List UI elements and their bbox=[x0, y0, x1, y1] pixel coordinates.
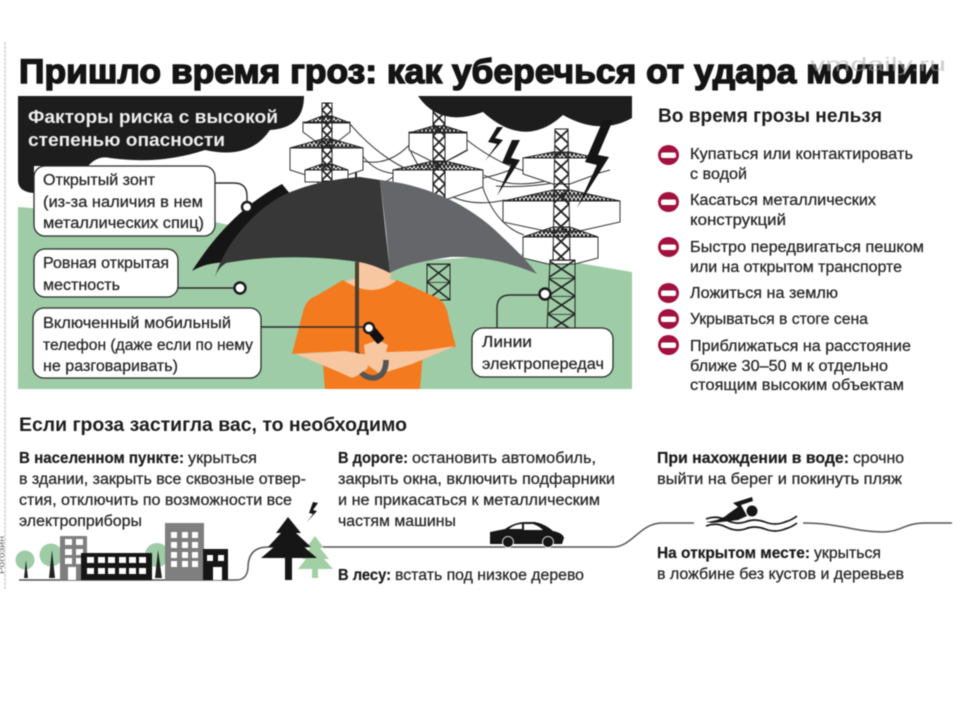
lightning bolts bbox=[485, 120, 613, 208]
text: on the road: В дороге: bbox=[338, 450, 408, 467]
text: in a town: укрыться bbox=[188, 450, 257, 467]
text: on the road: остановить автомобиль, bbox=[412, 450, 596, 467]
item: moving fast bbox=[658, 237, 924, 276]
text: in a town: в здании, закрыть все сквозные отвер- bbox=[19, 471, 306, 488]
umbrella hook handle bbox=[357, 352, 386, 378]
green trees bbox=[16, 543, 169, 578]
text: in the forest: встать под низкое дерево bbox=[395, 567, 584, 584]
callout: umbrella: металлических спиц) bbox=[43, 215, 204, 232]
black fir bbox=[261, 517, 317, 580]
text: in the open bbox=[657, 545, 904, 583]
text: in the forest: В лесу: bbox=[338, 567, 391, 584]
item: moving fast: или на открытом транспорте bbox=[690, 259, 902, 276]
text: in the open: На открытом месте: bbox=[657, 545, 810, 562]
item: tall objects: ближе 30–50 м к отдельно bbox=[690, 358, 888, 375]
callout: power lines bbox=[472, 288, 613, 377]
heading: risk factors bbox=[28, 106, 278, 150]
wires bbox=[291, 124, 610, 235]
text: on the road: закрыть окна, включить подфарники bbox=[338, 471, 615, 488]
heading: forbidden: Во время грозы нельзя bbox=[658, 105, 882, 127]
text: on the road: и не прикасаться к металлическим bbox=[338, 492, 600, 509]
item: bathing: с водой bbox=[690, 166, 747, 183]
storm cloud right bbox=[418, 96, 632, 132]
gray tall building bbox=[165, 523, 204, 580]
panel: forbidden during a storm bbox=[658, 105, 924, 394]
panel: risk factors illustration bbox=[18, 96, 632, 389]
text: on the road bbox=[338, 450, 615, 530]
text: in the open: укрыться bbox=[814, 545, 881, 562]
text: in the water: срочно bbox=[853, 450, 904, 467]
item: tall objects: стоящим высоким объектам bbox=[690, 377, 904, 394]
item: haystack: Укрываться в стоге сена bbox=[690, 311, 868, 328]
item: metal structures: Касаться металлических bbox=[690, 192, 876, 209]
watermark: vmdaily.ru bbox=[810, 55, 946, 76]
heading: what to do: Если гроза застигла вас, то необходимо bbox=[19, 414, 407, 436]
title: Пришло время гроз: как уберечься от удара молнии bbox=[19, 53, 940, 91]
item: bathing: Купаться или контактировать bbox=[690, 146, 913, 163]
car bbox=[490, 522, 564, 548]
text: in the water: При нахождении в воде: bbox=[657, 450, 849, 467]
power line towers bbox=[290, 103, 620, 330]
text: in a town: В населенном пункте: bbox=[19, 450, 184, 467]
item: bathing bbox=[658, 145, 913, 183]
text: in a town bbox=[19, 450, 306, 530]
umbrella back panel bbox=[192, 184, 320, 271]
item: tall objects bbox=[658, 335, 911, 394]
callout: open terrain: местность bbox=[43, 277, 120, 294]
text: in the water bbox=[657, 450, 904, 488]
callout: power lines: Линии bbox=[482, 334, 532, 351]
item: lying down bbox=[658, 283, 838, 303]
person bbox=[292, 258, 456, 389]
text: in the open: в ложбине без кустов и деревьев bbox=[657, 566, 904, 583]
mobile phone bbox=[366, 325, 385, 344]
green fir bbox=[298, 536, 333, 578]
town illustration bbox=[16, 523, 228, 580]
callout: mobile phone bbox=[33, 308, 374, 378]
tower 3 bbox=[503, 129, 620, 330]
text: in the water: выйти на берег и покинуть пляж bbox=[657, 471, 903, 488]
black small building bbox=[203, 549, 228, 580]
storm cloud left bbox=[18, 96, 304, 193]
text: in a town: стия, отключить по возможности все bbox=[19, 492, 292, 509]
ground line bbox=[19, 523, 952, 580]
item: metal structures bbox=[658, 192, 876, 229]
small lightning bbox=[307, 502, 318, 522]
umbrella bbox=[192, 172, 537, 378]
arms and hands bbox=[296, 340, 455, 378]
text: in a town: электроприборы bbox=[19, 513, 142, 530]
item: tall objects: Приближаться на расстояние bbox=[690, 338, 911, 355]
green landscape bbox=[18, 207, 632, 389]
item: metal structures: конструкций bbox=[690, 212, 786, 229]
black low building bbox=[81, 553, 152, 580]
tower 2 bbox=[393, 105, 483, 300]
callout: umbrella bbox=[34, 166, 252, 236]
callout: umbrella: (из-за наличия в нем bbox=[43, 194, 203, 211]
gripping hand bbox=[343, 352, 368, 375]
item: moving fast: Быстро передвигаться пешком bbox=[690, 239, 924, 256]
neck bbox=[343, 258, 400, 292]
callout: power lines: электропередач bbox=[482, 356, 604, 373]
callout: umbrella: Открытый зонт bbox=[43, 172, 155, 189]
forest illustration bbox=[261, 502, 333, 580]
callout: mobile phone: Включенный мобильный bbox=[43, 315, 231, 332]
callout: open terrain bbox=[34, 249, 246, 297]
callout: mobile phone: не разговаривать) bbox=[43, 358, 178, 375]
tower 1 bbox=[290, 103, 363, 182]
callout: open terrain: Ровная открытая bbox=[43, 255, 169, 272]
umbrella right panel bbox=[380, 180, 537, 274]
swimmer bbox=[706, 497, 797, 531]
item: lying down: Ложиться на землю bbox=[690, 285, 838, 302]
heading: risk factors: степенью опасности bbox=[28, 129, 225, 150]
text: on the road: частям машины bbox=[338, 513, 456, 530]
umbrella main panel bbox=[215, 177, 390, 277]
callout: mobile phone: телефон (даже если по нему bbox=[43, 337, 253, 354]
orange t-shirt bbox=[292, 280, 456, 389]
heading: risk factors: Факторы риска с высокой bbox=[28, 106, 278, 127]
gray building left bbox=[60, 536, 87, 580]
umbrella shaft bbox=[355, 262, 359, 356]
